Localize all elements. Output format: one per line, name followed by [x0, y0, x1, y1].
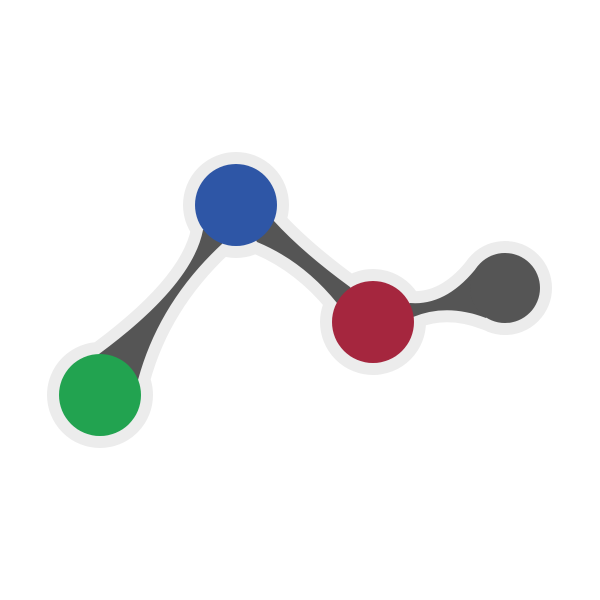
node: red	[332, 281, 414, 363]
node: gray	[470, 253, 540, 323]
node: green	[59, 354, 141, 436]
outline halo	[59, 164, 540, 436]
node: blue	[195, 164, 277, 246]
connectors	[88, 205, 505, 395]
